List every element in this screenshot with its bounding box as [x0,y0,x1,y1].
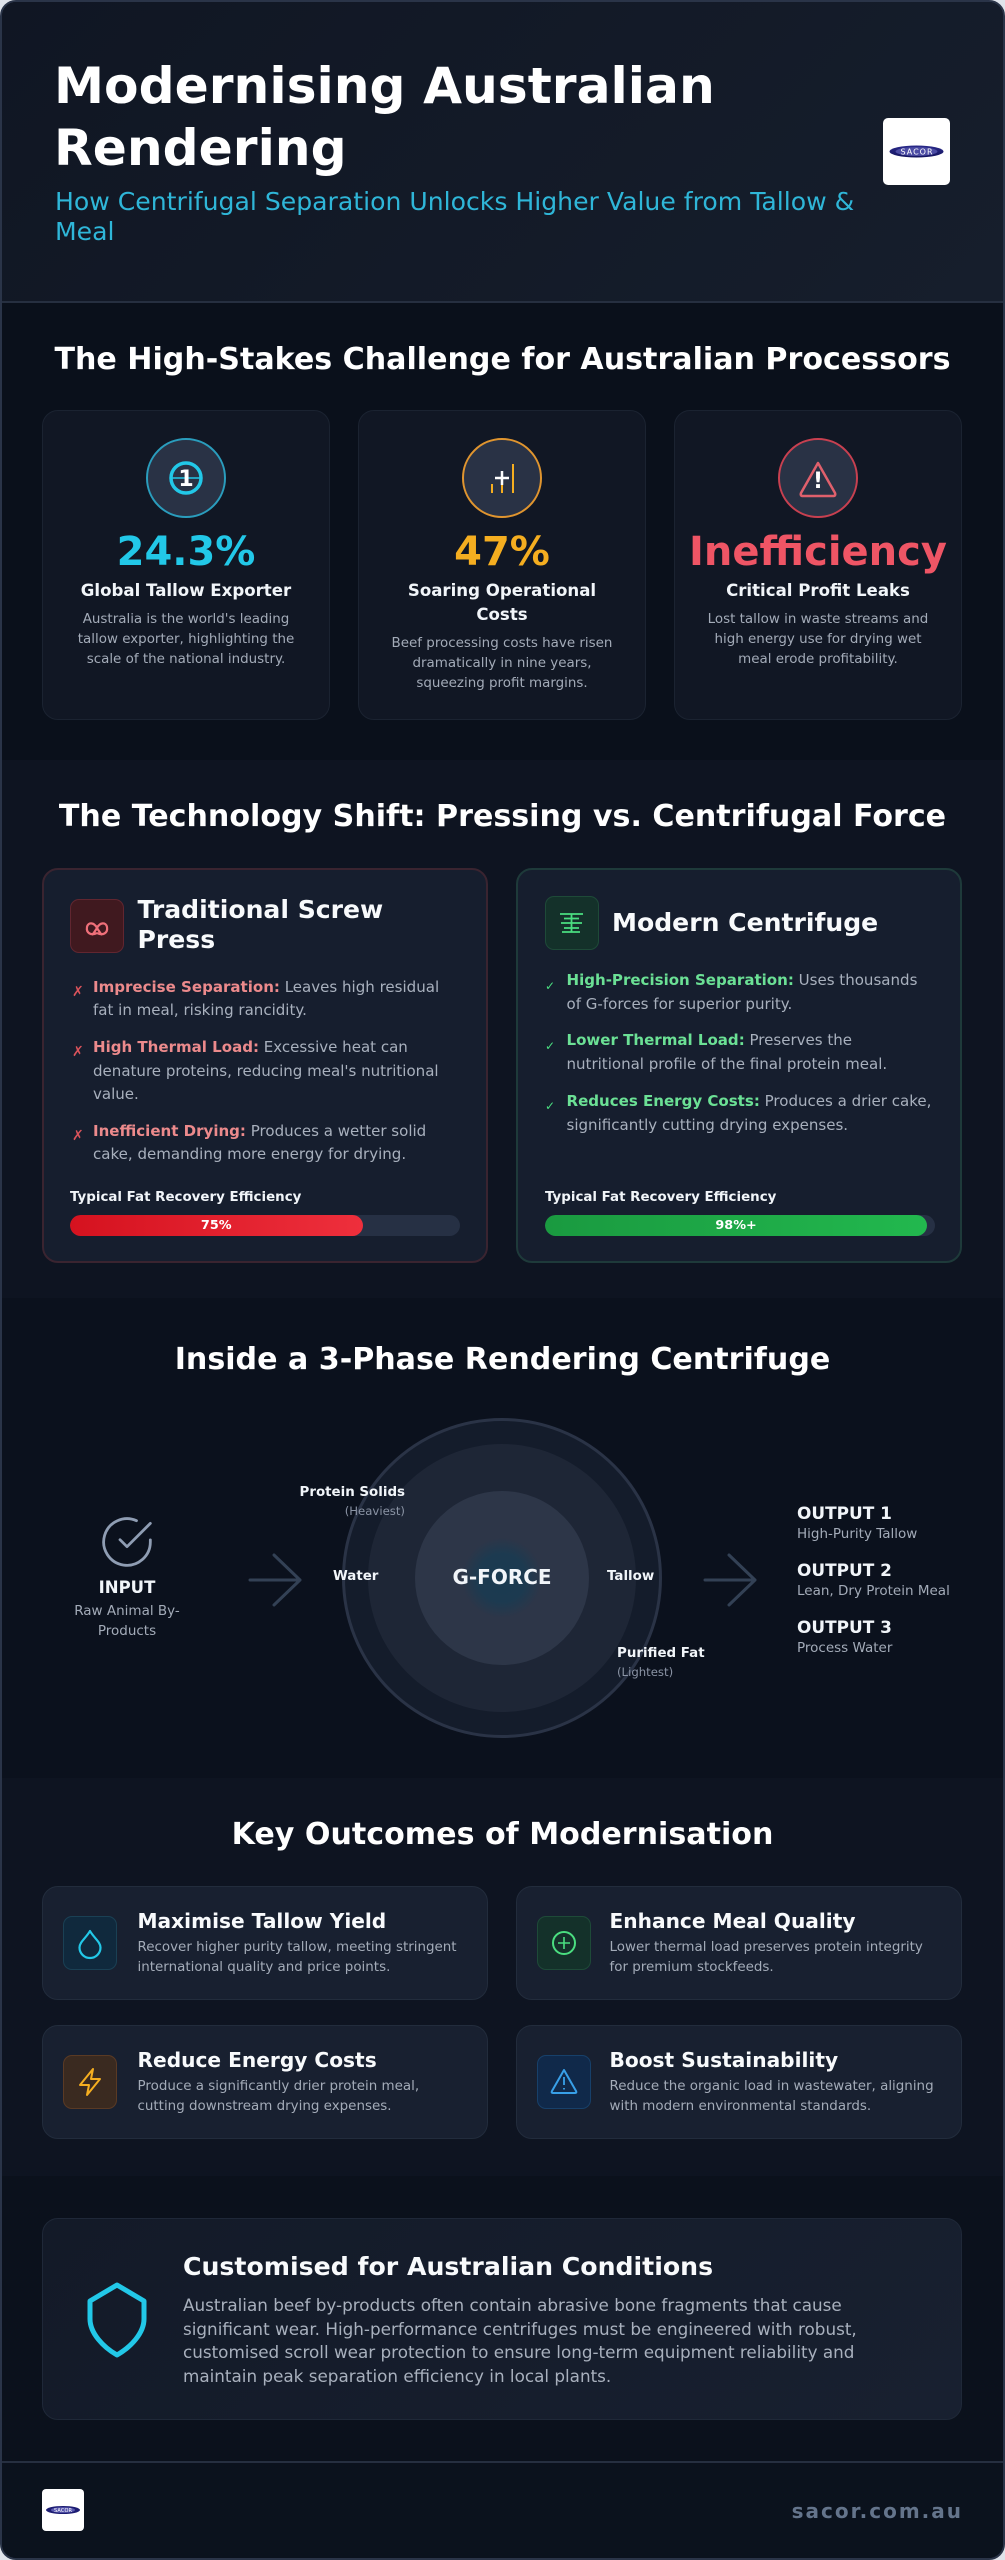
section background: callout [0,2176,1005,2462]
description: meal erode profitability. [738,652,898,667]
card title: Press [138,925,215,954]
subtitle [55,187,854,246]
item [566,1092,931,1134]
input icon [102,1517,152,1567]
panel: modern centrifuge [516,868,962,1263]
item [566,971,917,1013]
card title [138,895,383,954]
item: High-Precision Separation: Uses thousands [566,971,917,989]
subtitle: How Centrifugal Separation Unlocks Higher Value from Tallow & [55,187,854,216]
item: significantly cutting drying expenses. [566,1116,848,1134]
heading: technology shift: The Technology Shift: Pressing vs. Centrifugal Force [59,799,946,834]
icon: shield [88,2282,146,2358]
bar: 75 percent [70,1215,460,1236]
description: dramatically in nine years, [412,656,592,671]
section background: challenge [0,303,1005,760]
item: nutritional profile of the final protein meal. [566,1055,887,1073]
logo: footer [42,2489,84,2531]
item text [610,2078,934,2114]
icon: globe [146,438,226,518]
description: Lost tallow in waste streams and [708,612,928,626]
section background: footer [0,2461,1005,2560]
description: squeezing profit margins. [416,676,588,691]
stat: 24.3% [117,529,255,575]
outputs: Process Water [797,1640,892,1656]
footer url: sacor.com.au [792,2499,963,2523]
marker: ✗ [72,984,84,1000]
label: Critical Profit Leaks [726,581,910,600]
bar label: Typical Fat Recovery Efficiency [545,1190,776,1205]
item: Inefficient Drying: Produces a wetter solid [93,1122,426,1140]
item: denature proteins, reducing meal's nutritional [93,1062,439,1080]
description: Beef processing costs have risen [392,636,612,650]
item text: Reduce the organic load in wastewater, aligning [610,2078,934,2094]
icon: centrifuge [545,896,599,950]
item title: Enhance Meal Quality [610,1908,856,1932]
title: Modernising Australian [54,56,715,115]
marker: ✗ [72,1044,84,1060]
bar: 98 percent: 98%+ [715,1218,757,1233]
item text [610,1940,923,1975]
arrow [704,1554,756,1606]
label: purified fat [617,1646,705,1679]
list: drawbacks [72,978,439,1163]
item: Reduces Energy Costs: Produces a drier cake, [566,1092,931,1110]
outputs [797,1502,950,1656]
section background: centrifuge [0,1298,1005,1778]
icon: warning: ! [813,469,823,494]
output 1: OUTPUT 1 [797,1502,892,1522]
marker: ✗ [72,1128,84,1144]
marker: ✓ [545,1099,555,1113]
label: purified fat: (Lightest) [617,1665,673,1679]
item: cake, demanding more energy for drying. [93,1145,406,1163]
icon: warning [778,438,858,518]
panel: traditional screw press [42,868,488,1263]
label: protein solids: (Heaviest) [345,1504,405,1518]
callout: australian conditions [42,2218,962,2420]
marker: ✓ [545,1039,555,1053]
bar: 98 percent [545,1215,935,1236]
icon: plus circle [536,1916,590,1970]
card title: Traditional Screw [138,895,383,924]
panel: maximise tallow yield [42,1886,488,2000]
item: Lower Thermal Load: Preserves the [566,1031,852,1049]
callout text: significant wear. High-performance centrifuges must be engineered with robust, [183,2318,857,2338]
label: protein solids [300,1485,405,1518]
icon: drop [63,1916,117,1970]
item text: Produce a significantly drier protein meal, [138,2078,419,2094]
marker: ✓ [545,978,555,992]
item: of G-forces for superior purity. [566,995,792,1013]
section background: header [0,0,1005,303]
icon: bolt [63,2055,117,2109]
callout text: Australian beef by-products often contain abrasive bone fragments that cause [183,2295,842,2315]
arrow [248,1554,302,1606]
item text: Recover higher purity tallow, meeting stringent [138,1940,457,1954]
input description: Raw Animal By- [74,1603,180,1619]
panel: operational costs [358,410,646,720]
callout title: Customised for Australian Conditions [183,2252,713,2281]
description [708,612,928,667]
list: benefits [545,971,931,1134]
item: fat in meal, risking rancidity. [93,1001,307,1019]
callout text [183,2295,857,2386]
heading: challenge: The High-Stakes Challenge for Australian Processors [54,342,951,377]
item title: Reduce Energy Costs [138,2048,377,2072]
bar: 75 percent: 75% [201,1218,232,1233]
section background: technology shift [0,760,1005,1298]
section background: outcomes [0,1778,1005,2176]
input description: Products [98,1623,156,1639]
label: g-force: G-FORCE [452,1565,552,1589]
item [93,1038,439,1103]
item: Imprecise Separation: Leaves high residual [93,978,439,996]
panel: reduce energy costs [42,2025,488,2139]
stat: 47% [454,529,550,575]
label: purified fat: Purified Fat [617,1646,705,1661]
panel: enhance meal quality [516,1886,962,2000]
logo: header [883,118,950,185]
subtitle: Meal [55,217,114,246]
outputs: Lean, Dry Protein Meal [797,1582,950,1598]
description: scale of the national industry. [87,652,285,667]
title: Rendering [54,118,347,177]
icon: triangle alert [536,2055,590,2109]
item text: international quality and price points. [138,1960,390,1975]
label: Global Tallow Exporter [81,581,291,600]
logo: footer: SACOR [54,2508,73,2514]
label: Soaring Operational [408,581,596,600]
item [566,1031,887,1073]
callout text: customised scroll wear protection to ensure long-term equipment reliability and [183,2342,854,2362]
diagram: centrifuge [74,1418,950,1738]
input label: INPUT [99,1578,155,1597]
heading: outcomes: Key Outcomes of Modernisation [232,1817,773,1852]
label [408,581,596,624]
panel: boost sustainability [516,2025,962,2139]
card title: Modern Centrifuge [612,908,878,937]
panel: tallow exporter [42,410,330,720]
description [78,612,294,667]
panel: profit leaks [674,410,962,720]
item: High Thermal Load: Excessive heat can [93,1038,408,1056]
item [93,1122,426,1163]
description: Australia is the world's leading [83,612,289,626]
icon: globe: 1 [178,467,194,492]
output 2: OUTPUT 2 [797,1560,892,1580]
item text: for premium stockfeeds. [610,1960,774,1975]
description: tallow exporter, highlighting the [78,632,294,647]
item: value. [93,1085,139,1103]
output 3: OUTPUT 3 [797,1616,892,1636]
input description [74,1603,180,1639]
description [392,636,612,691]
heading: centrifuge: Inside a 3-Phase Rendering Centrifuge [175,1342,830,1377]
icon: screw press [70,899,124,953]
title [54,56,715,177]
item title: Boost Sustainability [610,2048,838,2072]
bar label: Typical Fat Recovery Efficiency [70,1190,301,1205]
callout text: maintain peak separation efficiency in local plants. [183,2366,611,2386]
description: high energy use for drying wet [714,632,922,647]
outputs: High-Purity Tallow [797,1526,917,1542]
item text: Lower thermal load preserves protein integrity [610,1940,923,1954]
icon: bar chart [462,438,542,518]
label: Costs [476,605,528,624]
label: protein solids: Protein Solids [300,1485,405,1500]
logo: header: SACOR [900,147,933,156]
centrifuge rings [342,1418,662,1738]
item text: with modern environmental standards. [610,2099,871,2114]
stat: Inefficiency [689,529,947,575]
item text [138,2078,419,2114]
label: tallow: Tallow [607,1569,654,1584]
item title: Maximise Tallow Yield [138,1908,386,1932]
item text [138,1940,457,1975]
label: water: Water [333,1569,378,1584]
item [93,978,439,1019]
item text: cutting downstream drying expenses. [138,2099,392,2114]
